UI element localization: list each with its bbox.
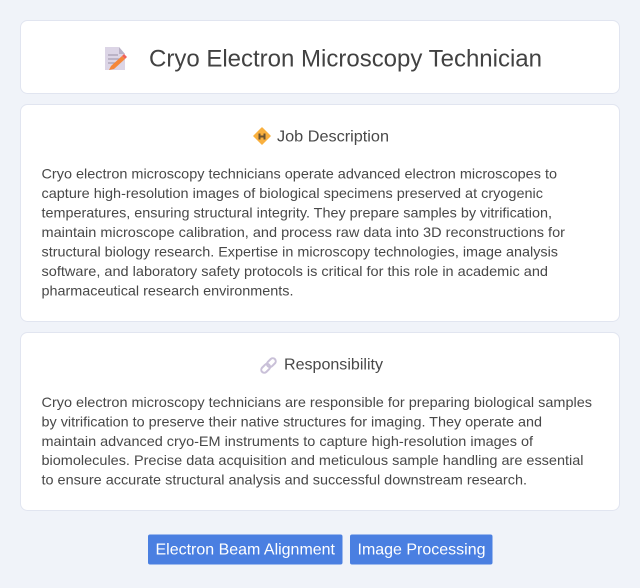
text block: responsibility: to ensure accurate structural analysis and successful downstream research. [42, 472, 527, 488]
heading: job description: Job Description [277, 128, 389, 146]
heading: responsibility: Responsibility [284, 356, 383, 374]
tag: electron beam alignment [148, 534, 342, 564]
tag: image processing [350, 534, 492, 564]
icon: diamond [254, 128, 270, 144]
text block: job description: structural biology research. Expertise in microscopy technologies, image analysis [42, 244, 558, 260]
text block: job description: capture high-resolution images of biological specimens preserved at cryogenic [42, 185, 543, 201]
panel: job description [20, 104, 620, 322]
text block: job description: software, and laboratory safety protocols is critical for this role in academic and [42, 263, 548, 279]
icon: document with pencil [105, 47, 127, 70]
text block: responsibility: by vitrification to preserve their native structures for imaging. They operate and [42, 414, 542, 430]
title text: Cryo Electron Microscopy Technician [149, 46, 542, 72]
text block: job description: pharmaceutical research environments. [42, 282, 294, 298]
text block: responsibility: maintain advanced cryo-EM instruments to capture high-resolution images of [42, 433, 533, 449]
panel: title [20, 20, 620, 94]
icon: link [260, 357, 277, 374]
panel: responsibility [20, 332, 620, 510]
text block: job description: maintain microscope calibration, and process raw data into 3D reconstructions for [42, 224, 565, 240]
text block: job description: temperatures, ensuring structural integrity. They prepare samples by vitrification, [42, 204, 552, 220]
text block: responsibility [42, 394, 592, 488]
text block: responsibility: Cryo electron microscopy technicians are responsible for preparing biological samples [42, 394, 592, 410]
text block: job description: Cryo electron microscopy technicians operate advanced electron microscopes to [42, 166, 557, 182]
tag: electron beam alignment: Electron Beam Alignment [156, 542, 336, 558]
text block: responsibility: biomolecules. Precise data acquisition and meticulous sample handling are essential [42, 452, 584, 468]
tag: image processing: Image Processing [358, 542, 486, 558]
text block: job description [42, 166, 565, 298]
